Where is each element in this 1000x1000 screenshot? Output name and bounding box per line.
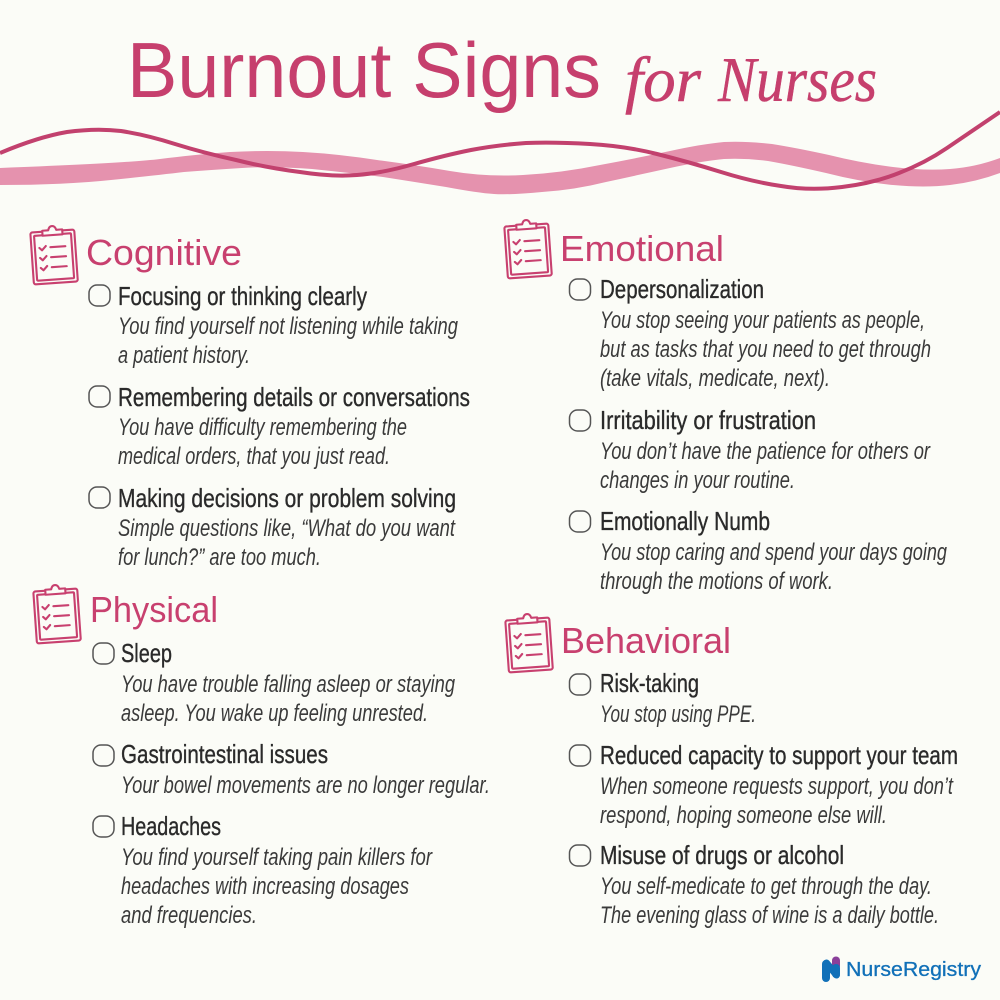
checklist item: gastrointestinal <box>93 739 490 799</box>
checklist item: remembering: Remembering details or conversations <box>118 382 470 412</box>
heading: cognitive: Cognitive <box>86 232 242 273</box>
heading: physical: Physical <box>90 589 218 630</box>
checklist item: remembering <box>89 382 470 470</box>
icon: clipboard emotional <box>504 219 552 278</box>
checklist item: sleep: asleep. You wake up feeling unrested. <box>121 700 428 727</box>
checklist item: irritability <box>570 405 931 494</box>
wave line <box>0 112 1000 189</box>
checklist item: depersonalization: (take vitals, medicate, next). <box>600 365 830 392</box>
checklist item: headaches: You find yourself taking pain killers for <box>121 844 433 871</box>
logo: NurseRegistry: NurseRegistry <box>846 959 981 981</box>
wave ribbon band <box>0 142 1000 194</box>
checklist item: gastrointestinal: Gastrointestinal issues <box>121 739 328 769</box>
checklist item: risk-taking <box>570 668 756 728</box>
checklist item: irritability: changes in your routine. <box>600 467 795 494</box>
checklist item: numb: Emotionally Numb <box>600 506 770 536</box>
checklist item: risk-taking: Risk-taking <box>600 668 699 698</box>
heading: emotional: Emotional <box>560 228 724 269</box>
checklist item: misuse: Misuse of drugs or alcohol <box>600 840 844 870</box>
icon: clipboard physical <box>33 584 81 643</box>
title: Burnout Signs <box>127 26 601 114</box>
icon: clipboard behavioral <box>505 613 553 672</box>
panel: cognitive <box>30 225 470 571</box>
title <box>127 26 877 115</box>
checklist item: remembering: medical orders, that you just read. <box>118 443 390 470</box>
checklist item: focusing: a patient history. <box>118 342 250 369</box>
checklist item: decisions: for lunch?” are too much. <box>118 544 321 571</box>
checklist item: headaches <box>93 811 433 929</box>
checklist item: irritability: Irritability or frustration <box>600 405 816 435</box>
checklist item: decisions: Making decisions or problem solving <box>118 483 456 513</box>
checklist item: reduced capacity <box>570 740 958 829</box>
title: for <box>625 44 702 115</box>
checklist item: numb: through the motions of work. <box>600 568 833 595</box>
checklist item: focusing <box>89 281 458 369</box>
checklist item: focusing: Focusing or thinking clearly <box>118 281 367 311</box>
checklist item: headaches: and frequencies. <box>121 902 257 929</box>
checklist item: risk-taking: You stop using PPE. <box>600 701 756 728</box>
checklist item: headaches: Headaches <box>121 811 221 841</box>
checklist item: depersonalization: Depersonalization <box>600 274 764 304</box>
checklist item: depersonalization <box>570 274 931 392</box>
panel: behavioral <box>505 613 958 929</box>
checklist item: misuse <box>570 840 939 929</box>
checklist item: remembering: You have difficulty remembering the <box>118 414 407 441</box>
checklist item: decisions: Simple questions like, “What do you want <box>118 515 456 542</box>
icon: clipboard cognitive <box>30 225 78 284</box>
checklist item: gastrointestinal: Your bowel movements are no longer regular. <box>121 772 490 799</box>
checklist item: headaches: headaches with increasing dosages <box>121 873 409 900</box>
panel: physical <box>33 584 490 929</box>
checklist item: focusing: You find yourself not listening while taking <box>118 313 458 340</box>
checklist item: decisions <box>89 483 456 571</box>
checklist item: sleep <box>93 638 455 727</box>
panel: emotional <box>504 219 947 595</box>
checklist item: sleep: You have trouble falling asleep or staying <box>121 671 455 698</box>
heading: behavioral: Behavioral <box>561 620 731 661</box>
checklist item: numb <box>570 506 947 595</box>
checklist item: reduced capacity: respond, hoping someone else will. <box>600 802 887 829</box>
checklist item: sleep: Sleep <box>121 638 172 668</box>
title: Nurses <box>717 44 877 115</box>
